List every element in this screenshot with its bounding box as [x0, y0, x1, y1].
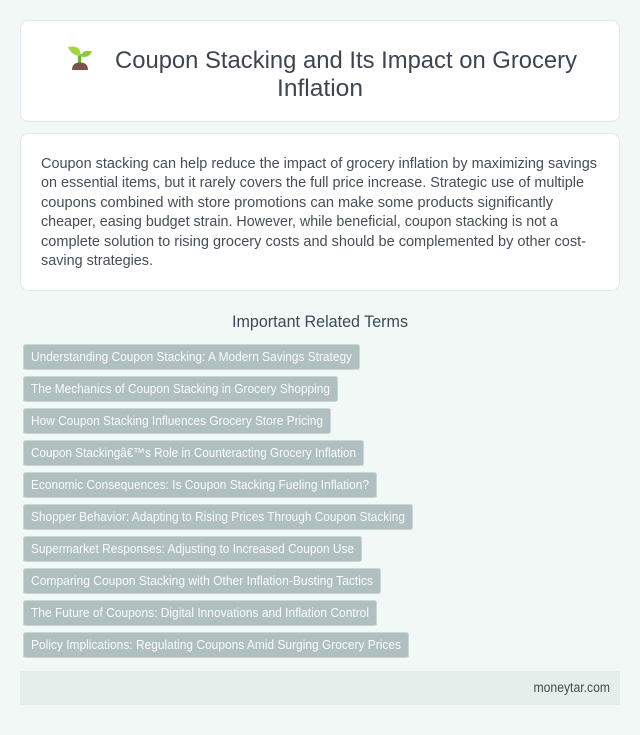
text block: summary paragraph: cheaper, easing budget strain. However, while beneficial, coupon stacking is not a [41, 213, 559, 230]
tag 5: Economic Consequences: Is Coupon Stacking Fueling Inflation? [31, 478, 369, 492]
panel: header [20, 20, 620, 122]
tag 1: Understanding Coupon Stacking: A Modern Savings Strategy [31, 350, 353, 364]
panel: summary [20, 134, 620, 290]
tag 10: Policy Implications: Regulating Coupons Amid Surging Grocery Prices [31, 638, 401, 652]
tag 6 [24, 504, 412, 530]
title: Coupon Stacking and Its Impact on Grocery [115, 47, 578, 74]
title [115, 47, 578, 102]
text block: summary paragraph: coupons combined with store promotions can make some products significantly [41, 194, 553, 211]
footer source: moneytar.com [534, 680, 610, 695]
text block: summary paragraph: on essential items, but it rarely covers the full price increase. Strategic use of multiple [41, 174, 584, 191]
text block: summary paragraph: saving strategies. [41, 252, 153, 269]
tag 8: Comparing Coupon Stacking with Other Inflation-Busting Tactics [31, 574, 373, 588]
tag 9 [24, 600, 376, 626]
tag 10 [24, 632, 408, 658]
tag list: related terms [24, 344, 412, 658]
tag 4: Coupon Stackingâ€™s Role in Counteracting Grocery Inflation [31, 446, 356, 460]
text block: summary paragraph [41, 155, 597, 269]
tag 2: The Mechanics of Coupon Stacking in Grocery Shopping [31, 382, 330, 396]
text block: summary paragraph: complete solution to rising grocery costs and should be complemented by other cost- [41, 233, 586, 250]
tag 7 [24, 536, 362, 562]
heading: related terms: Important Related Terms [232, 313, 408, 331]
title: Inflation [277, 75, 363, 102]
tag 1 [24, 344, 360, 370]
tag 2 [24, 376, 338, 402]
tag 3 [24, 408, 330, 434]
tag 5 [24, 472, 376, 498]
text block: summary paragraph: Coupon stacking can help reduce the impact of grocery inflation by maximizing savings [41, 155, 597, 172]
footer bar [20, 671, 620, 705]
tag 9: The Future of Coupons: Digital Innovations and Inflation Control [31, 606, 369, 620]
tag 6: Shopper Behavior: Adapting to Rising Prices Through Coupon Stacking [31, 510, 405, 524]
tag 7: Supermarket Responses: Adjusting to Increased Coupon Use [31, 542, 354, 556]
icon: seedling [68, 46, 92, 70]
tag 8 [24, 568, 380, 594]
tag 3: How Coupon Stacking Influences Grocery Store Pricing [31, 414, 323, 428]
tag 4 [24, 440, 364, 466]
